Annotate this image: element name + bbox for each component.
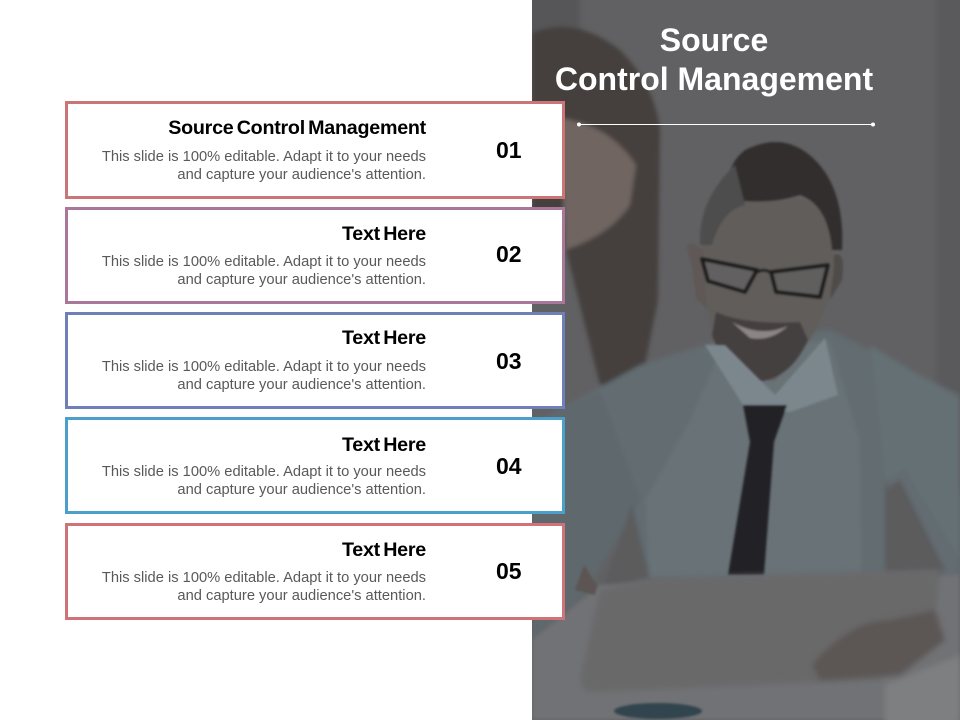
- gaps by the arms: [604, 505, 650, 585]
- panel: item 03: 03: [496, 348, 522, 374]
- panel: item 01: 01: [496, 137, 522, 163]
- hair: [729, 142, 842, 250]
- tablet: [581, 570, 940, 692]
- hand: [812, 610, 945, 680]
- panel: item 03: [65, 312, 565, 409]
- panel: item 01: and capture your audience's attention.: [177, 167, 426, 183]
- shirt base: [532, 330, 960, 640]
- panel: item 03: Text Here: [342, 327, 426, 349]
- panel: item 03: This slide is 100% editable. Adapt it to your needs: [102, 359, 426, 375]
- tie: [728, 405, 787, 575]
- panel: item 01: Source Control Management: [168, 117, 426, 139]
- panel: item 01: [65, 101, 565, 199]
- table: [532, 575, 960, 720]
- panel: item 02: [65, 207, 565, 304]
- panel: item 02: This slide is 100% editable. Adapt it to your needs: [102, 254, 426, 270]
- panel: item 04: 04: [496, 453, 522, 479]
- glasses: [702, 259, 757, 292]
- man's head: [687, 142, 843, 382]
- beard: [712, 312, 808, 382]
- panel: item 04: Text Here: [342, 434, 426, 456]
- panel: item 02: 02: [496, 241, 522, 267]
- panel: item 05: and capture your audience's attention.: [177, 588, 426, 604]
- panel: item 03: and capture your audience's attention.: [177, 377, 426, 393]
- panel: item 01: This slide is 100% editable. Adapt it to your needs: [102, 149, 426, 165]
- woman: [532, 27, 660, 385]
- divider with end dots: [577, 122, 875, 126]
- panel: item 02: and capture your audience's attention.: [177, 272, 426, 288]
- panel: item 04: This slide is 100% editable. Adapt it to your needs: [102, 464, 426, 480]
- panel: item 02: Text Here: [342, 223, 426, 245]
- title: Control Management: [555, 61, 873, 97]
- title: [555, 22, 873, 97]
- panel: item 05: This slide is 100% editable. Adapt it to your needs: [102, 570, 426, 586]
- panel: item 05: [65, 523, 565, 620]
- panel: item 05: Text Here: [342, 539, 426, 561]
- panel: item 05: 05: [496, 558, 522, 584]
- panel: item 04: and capture your audience's attention.: [177, 482, 426, 498]
- title: Source: [660, 22, 768, 58]
- photo: man and woman looking at a tablet: [532, 0, 960, 720]
- panel: item 04: [65, 417, 565, 514]
